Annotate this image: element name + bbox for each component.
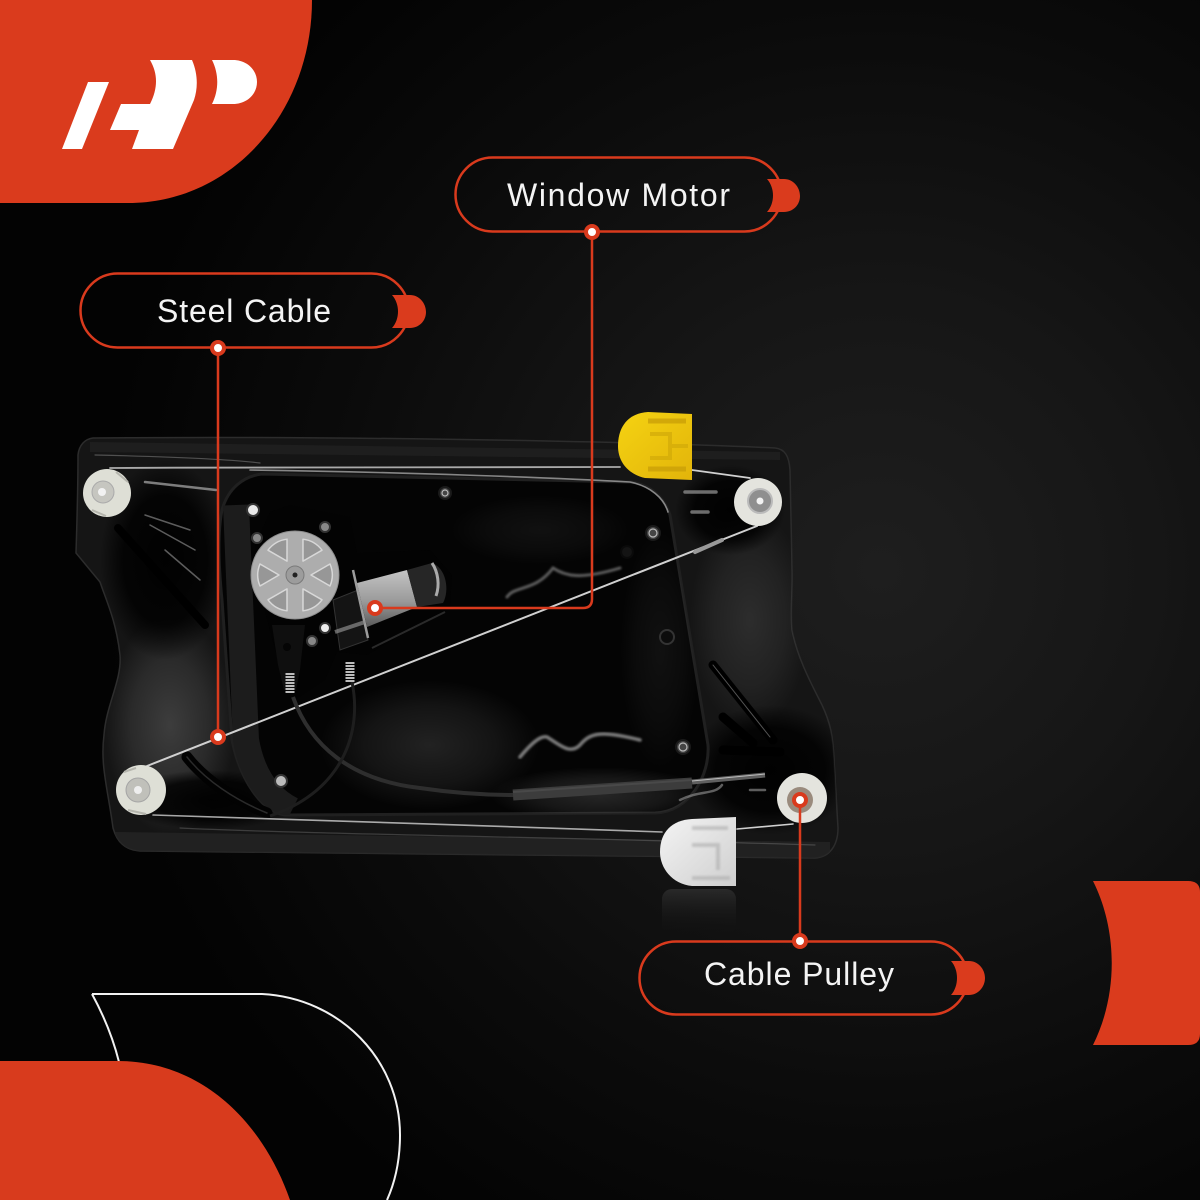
window motor label: Window Motor [507,177,730,213]
motor housing [333,563,446,650]
cable pulley label: Cable Pulley [704,956,894,992]
motor recess and gearbox [255,505,452,700]
callout: cable pulley [640,794,985,1014]
decorative shape: right edge tab [1093,881,1200,1045]
cable pulley tab [951,961,985,995]
dark ribs [118,528,780,813]
steel cable [110,467,793,832]
pulley: bottom left [116,765,166,815]
callout: steel cable [80,274,426,743]
inner plate [219,474,708,815]
pulley: top right [734,478,782,526]
steel cable leader line [217,348,219,737]
panel highlights [95,455,815,845]
window regulator product [76,412,855,935]
steel cable pill [80,274,408,348]
pulley: top left [83,469,131,517]
bolts [247,487,690,787]
window motor pill [456,158,782,232]
plate soft shading [236,495,710,823]
gearbox screws [252,522,330,646]
mounting panel outer [76,437,838,858]
cable pulley pill [640,942,968,1014]
panel soft shading [90,442,855,860]
cable pulley leader line [799,800,801,941]
sheath and foam tube [270,682,765,816]
pulley: bottom right [777,773,827,823]
decorative shape: white outline [92,994,400,1200]
window motor leader line [375,232,592,608]
window motor tab [767,179,800,212]
motor drum [244,524,346,626]
sprocket [272,625,305,690]
logo badge [0,0,312,203]
window motor anchor dots [369,226,598,614]
callout: window motor [369,158,800,614]
decorative shape: bottom left red [0,1061,290,1200]
cable pulley anchor dots [794,794,806,947]
white end cap [660,817,736,886]
steel cable anchor dots [212,342,224,743]
yellow end cap [618,412,692,480]
steel cable label: Steel Cable [157,293,331,329]
cable springs [290,662,350,693]
end cap reflection [662,889,736,935]
steel cable tab [392,295,426,328]
logo mark [62,60,257,149]
